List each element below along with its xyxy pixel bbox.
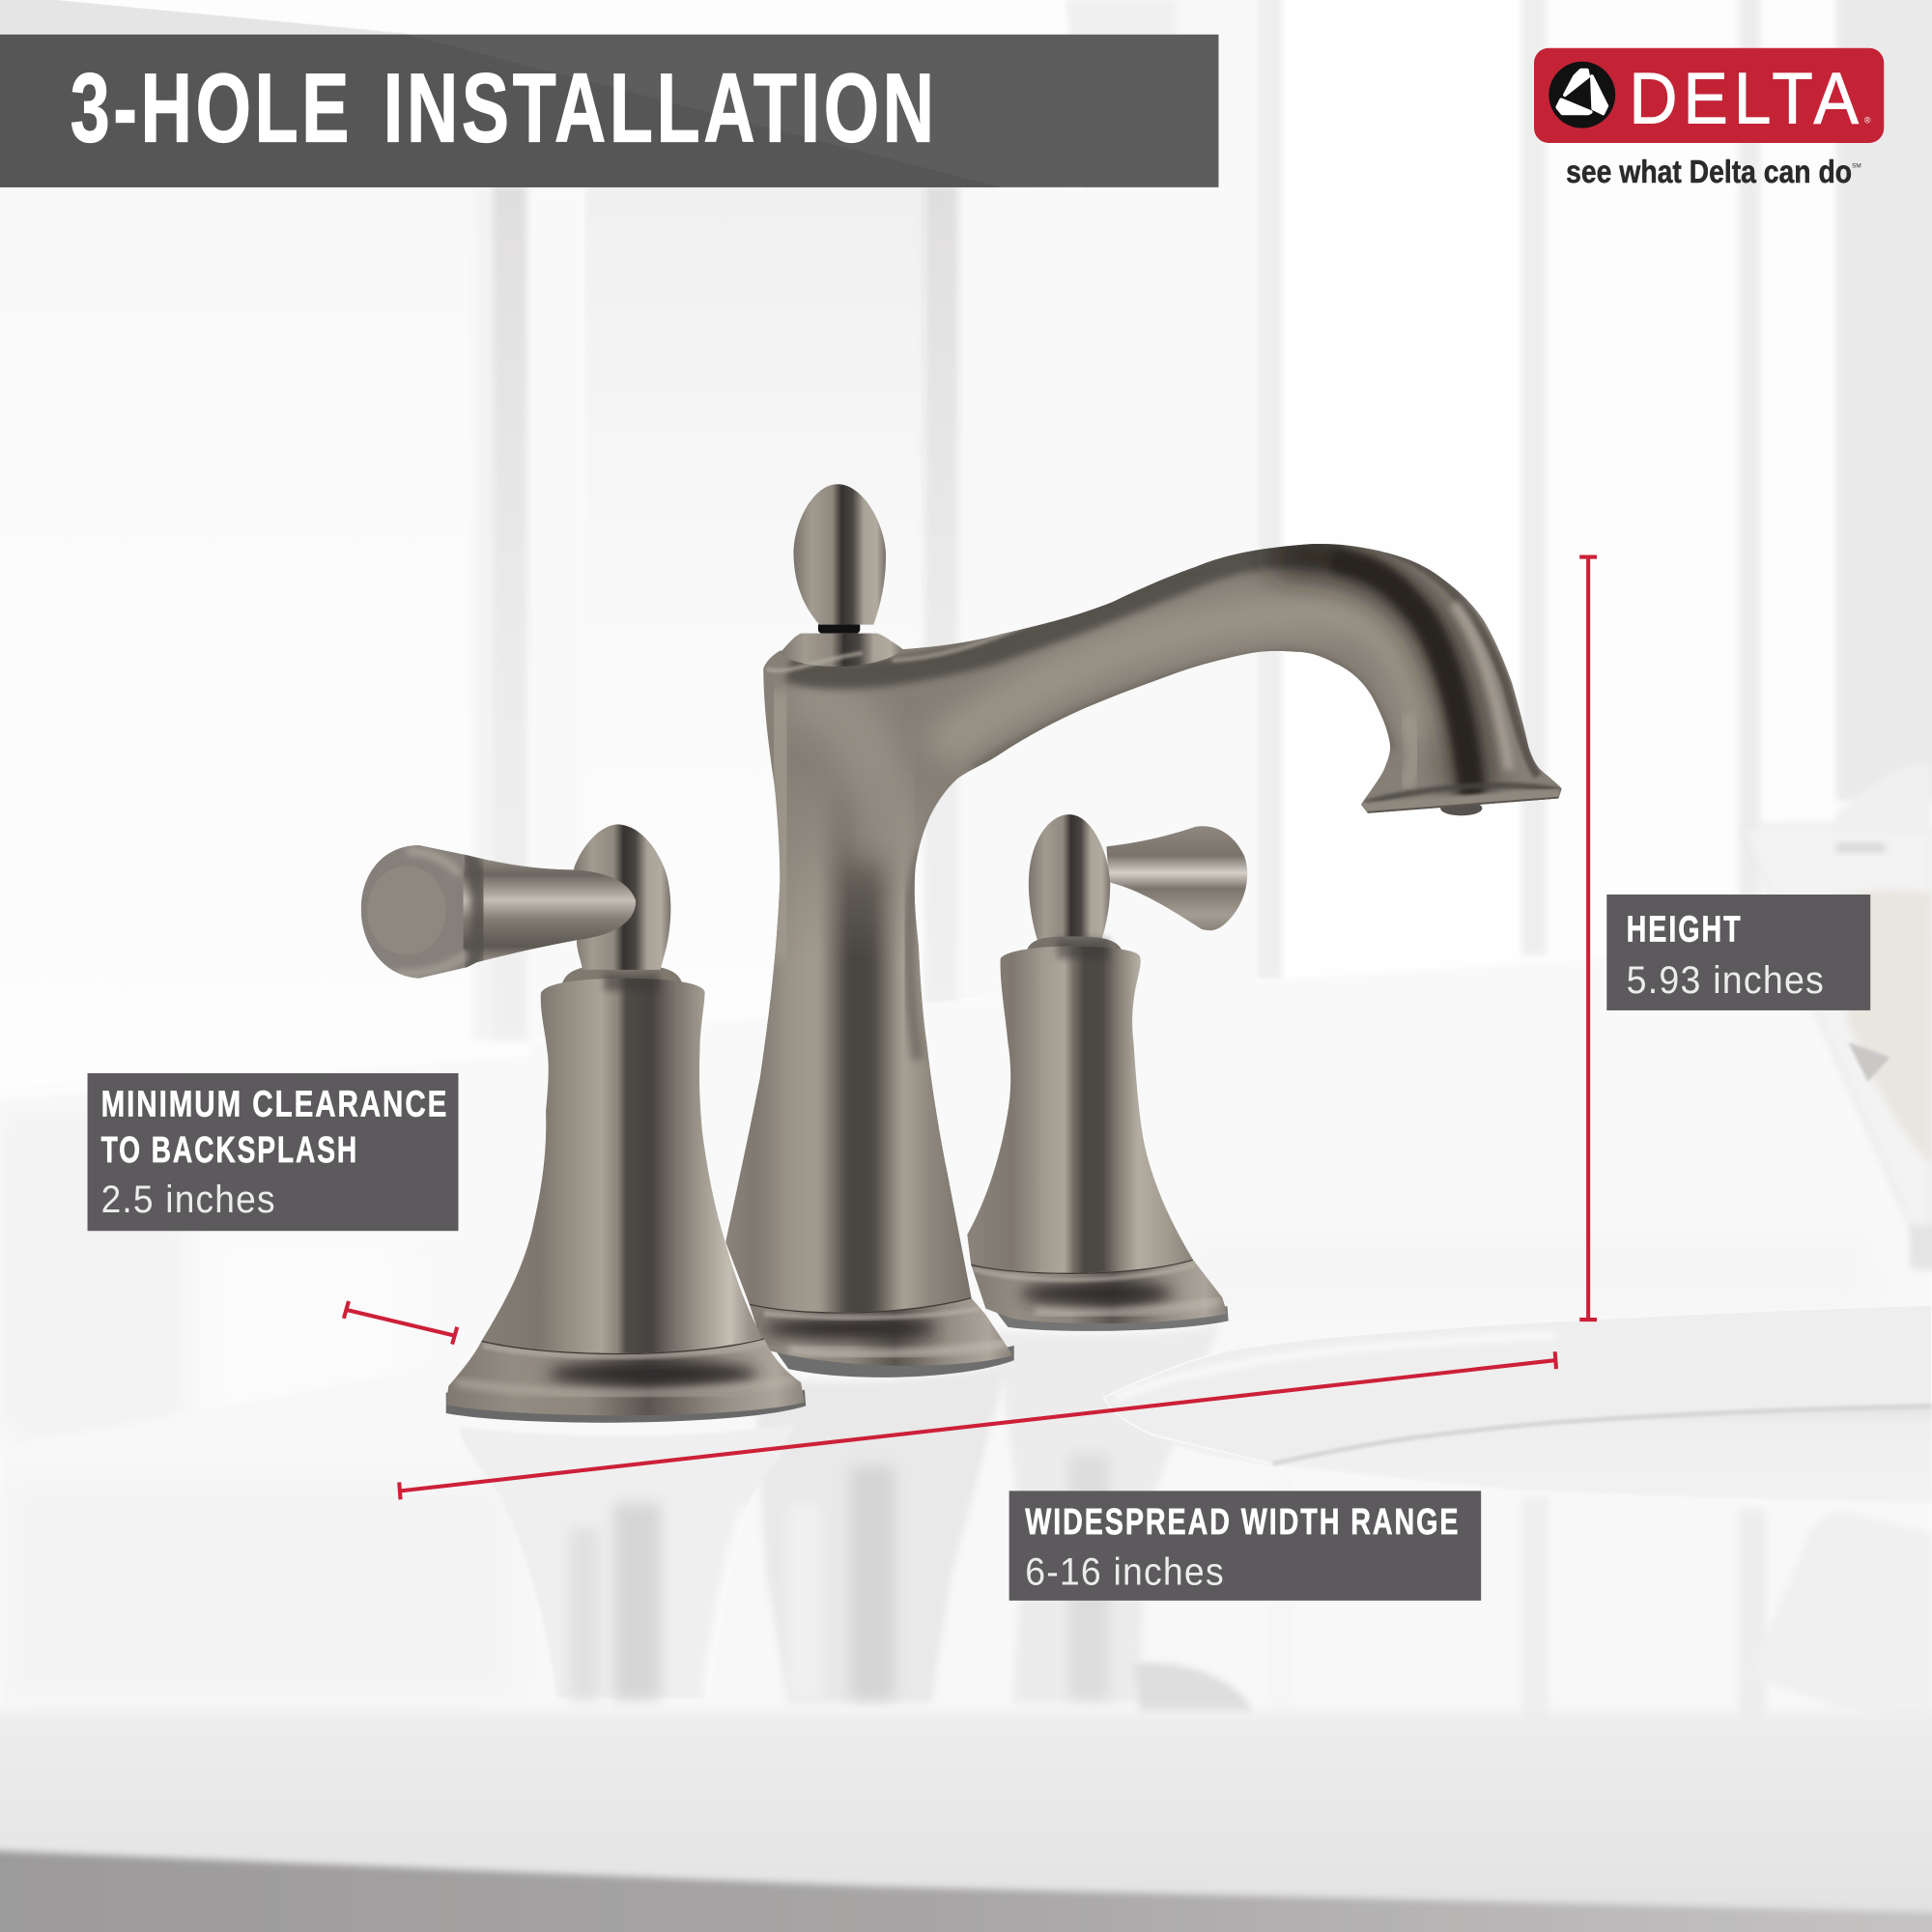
faucet reflections — [458, 1324, 1252, 1713]
shelf above wall — [0, 0, 1084, 191]
right lever — [1106, 826, 1247, 930]
countertop — [0, 1269, 1932, 1725]
reflection: center body — [754, 1363, 1008, 1703]
callout: minimum clearance: TO BACKSPLASH — [101, 1129, 358, 1171]
right collar — [1026, 936, 1122, 952]
wall panels — [0, 0, 1520, 1084]
callout: minimum clearance: 2.5 inches — [101, 1179, 276, 1221]
black stem — [818, 622, 860, 634]
center base — [750, 1297, 1014, 1378]
callout: minimum clearance: MINIMUM CLEARANCE — [101, 1084, 448, 1125]
backsplash — [0, 936, 1932, 1452]
lever end face — [367, 867, 446, 955]
left hub — [573, 824, 670, 970]
Delta logo: ® — [1864, 116, 1871, 126]
counter front edge — [0, 1713, 1932, 1932]
sink basin — [1151, 1399, 1932, 1503]
right body — [967, 947, 1193, 1273]
logo mark — [1548, 62, 1615, 128]
right base — [971, 1260, 1229, 1331]
reflection: right handle — [996, 1324, 1252, 1713]
tagline: see what Delta can do — [1566, 155, 1852, 190]
left base — [446, 1339, 806, 1423]
title: 3-HOLE INSTALLATION — [71, 55, 938, 163]
Delta logo: SM — [1852, 162, 1861, 169]
central body and spout — [708, 484, 1577, 1380]
callout: widespread width — [1009, 1491, 1481, 1601]
reflection: left handle — [458, 1423, 795, 1700]
wall grooves — [473, 0, 1932, 1041]
faucet — [357, 484, 1577, 1427]
aerator — [1440, 801, 1482, 815]
dimension line: widespread width — [399, 1351, 1556, 1499]
sink rim — [1104, 1305, 1932, 1463]
left collar — [562, 965, 683, 984]
right bulb — [1029, 814, 1110, 940]
collar under knob — [766, 634, 903, 670]
glass jar — [1743, 764, 1932, 1269]
title banner — [0, 35, 1218, 187]
callout: height: 5.93 inches — [1627, 959, 1825, 1002]
left body — [482, 979, 763, 1353]
spout and pillar — [708, 529, 1577, 1343]
reflected wall stripes on counter — [1269, 1479, 1932, 1725]
right handle — [961, 814, 1247, 1337]
dimension line: height — [1579, 557, 1597, 1320]
callout: minimum clearance — [88, 1073, 458, 1231]
logo wordmark: DELTA — [1629, 58, 1864, 139]
callout: height: HEIGHT — [1627, 908, 1743, 950]
callout: height — [1606, 895, 1870, 1010]
Delta logo — [1534, 48, 1884, 190]
left lever — [357, 842, 640, 983]
callout: widespread width: 6-16 inches — [1025, 1550, 1225, 1593]
callout: widespread width: WIDESPREAD WIDTH RANGE — [1025, 1501, 1460, 1543]
dimension line: minimum clearance — [344, 1301, 457, 1345]
spout knob — [793, 484, 886, 625]
left handle — [357, 824, 813, 1427]
